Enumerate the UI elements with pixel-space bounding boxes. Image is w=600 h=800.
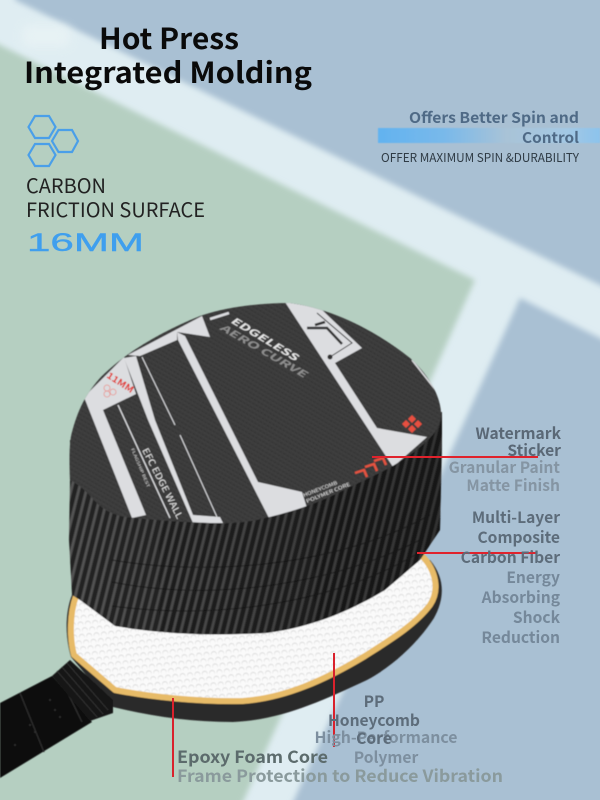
label: multi-layer carbon fiber: Carbon Fiber xyxy=(461,546,560,568)
label: polymer honeycomb: Honeycomb xyxy=(328,709,420,731)
label: watermark sticker: Sticker xyxy=(507,439,561,461)
paddle grip xyxy=(0,676,92,778)
honeycomb core with foam ring xyxy=(71,556,436,701)
title: Hot Press xyxy=(99,16,239,58)
icon: carbon hexagons xyxy=(28,116,78,166)
disc lettering: POLYMER CORE xyxy=(305,481,351,505)
label: epoxy foam core: Frame Protection to Reduce Vibration xyxy=(177,762,503,787)
label: multi-layer carbon fiber: Energy xyxy=(506,566,560,588)
label: multi-layer carbon fiber: Composite xyxy=(477,526,560,548)
chevrons xyxy=(355,458,386,477)
disc lettering: EFC EDGE WALL xyxy=(139,445,186,521)
spin callout: OFFER MAXIMUM SPIN &DURABILITY xyxy=(381,149,580,166)
label: multi-layer carbon fiber xyxy=(461,506,561,648)
label: polymer honeycomb: Polymer xyxy=(354,746,418,768)
label: polymer honeycomb: Core xyxy=(356,727,392,749)
label: polymer honeycomb xyxy=(314,690,458,768)
spin callout: Offers Better Spin and xyxy=(409,107,579,128)
label: multi-layer carbon fiber: Absorbing xyxy=(481,586,561,608)
title: Integrated Molding xyxy=(24,50,312,92)
label: epoxy foam core: Epoxy Foam Core xyxy=(177,743,328,768)
label: polymer honeycomb: High-Performance xyxy=(314,726,458,748)
label: watermark sticker: Granular Paint xyxy=(449,456,560,478)
disc lettering: AERO CURVE xyxy=(216,319,311,382)
carbon layer stack xyxy=(69,412,442,634)
disc lettering: FLAGSHIP BEST xyxy=(129,447,151,489)
label: watermark sticker xyxy=(449,422,562,496)
label: multi-layer carbon fiber: Multi-Layer xyxy=(472,506,560,528)
blue highlight bar xyxy=(378,128,600,143)
leader line: watermark sticker xyxy=(372,456,538,458)
pickleball paddle xyxy=(0,295,450,778)
carbon friction surface label: CARBON xyxy=(26,170,106,199)
title xyxy=(24,16,312,92)
diamonds xyxy=(402,415,422,433)
spin callout: Control xyxy=(522,127,579,148)
disc lettering: 11MM xyxy=(104,369,137,396)
spin callout xyxy=(381,107,580,166)
label: watermark sticker: Watermark xyxy=(475,422,562,444)
label: epoxy foam core xyxy=(177,743,503,787)
disc lettering xyxy=(104,313,351,521)
disc lettering: EDGELESS xyxy=(228,313,302,365)
carbon friction surface label xyxy=(26,170,205,223)
leader line: foam core xyxy=(172,698,174,777)
paddle frame xyxy=(67,560,442,722)
handle collar xyxy=(52,660,113,721)
label: multi-layer carbon fiber: Reduction xyxy=(481,626,560,648)
carbon friction surface label: FRICTION SURFACE xyxy=(26,194,205,223)
label: multi-layer carbon fiber: Shock xyxy=(513,606,561,628)
disc lettering: HONEYCOMB xyxy=(302,479,339,499)
top carbon sheet xyxy=(60,295,450,530)
label: watermark sticker: Matte Finish xyxy=(466,474,560,496)
leader line: carbon fiber xyxy=(417,552,537,554)
thickness 16MM: 16MM xyxy=(27,229,144,257)
leader line: honeycomb core xyxy=(333,653,335,747)
label: polymer honeycomb: PP xyxy=(364,690,384,712)
Y graphic xyxy=(307,313,352,359)
